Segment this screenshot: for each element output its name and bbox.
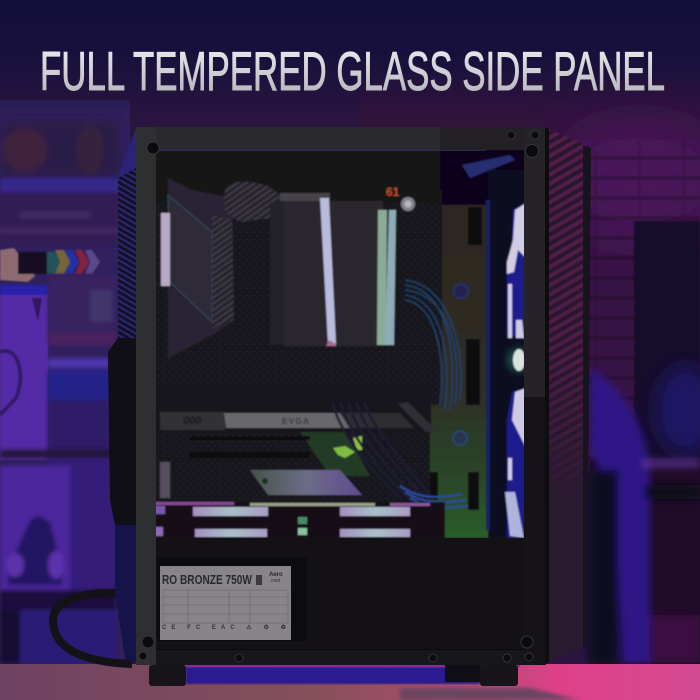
desk surface <box>0 664 700 700</box>
bottom fans <box>150 502 445 538</box>
case: top inner cable area <box>440 150 526 205</box>
desk glow under case <box>186 665 520 684</box>
white light strip left <box>161 213 170 286</box>
M.2 heatsink plate <box>250 470 362 495</box>
sleeved cable bundle <box>405 280 461 410</box>
top dark fade <box>0 0 700 120</box>
case: glass frame <box>136 127 546 665</box>
background: wall right of poster <box>48 275 116 458</box>
blue sleeved cables low <box>400 486 468 508</box>
background: dark monitor <box>634 221 700 459</box>
VRM heatsink <box>224 182 285 222</box>
PSU label: RO BRONZE 750W <box>162 573 252 587</box>
green glow logo <box>333 446 355 458</box>
power cable <box>53 593 132 664</box>
RAM sticks <box>377 210 396 345</box>
lower motherboard PCIe area <box>158 432 430 504</box>
led display: 61 <box>386 185 400 199</box>
PSU label: cool <box>271 578 280 584</box>
PSU label <box>160 566 291 640</box>
graphics card <box>149 386 436 434</box>
carbon fibre front panel <box>545 127 591 664</box>
motherboard <box>155 152 442 405</box>
background: shelf <box>0 178 120 244</box>
PSU label: Aero <box>269 572 283 578</box>
background: purple poster <box>0 285 48 460</box>
case: left mesh front panel edge <box>118 128 136 340</box>
icon: grommet <box>454 284 468 298</box>
PC case <box>108 127 591 665</box>
case: frame bars <box>136 127 545 665</box>
background: upper left blobs <box>0 120 120 178</box>
side fans behind glass <box>486 170 532 538</box>
background: figurine and chevron books <box>0 248 100 282</box>
graphics card: 000 <box>183 415 202 427</box>
graphics card: EVGA <box>282 416 310 426</box>
PSU window <box>157 558 307 641</box>
PSU shroud <box>136 538 526 665</box>
case: motherboard tray right <box>415 205 506 538</box>
background: gaming chair <box>590 368 700 665</box>
CPU cooler <box>270 193 383 346</box>
case: cutouts in tray <box>468 207 482 245</box>
power cables <box>332 402 432 498</box>
interior behind glass <box>149 150 532 538</box>
rear IO cover <box>168 178 234 358</box>
case feet <box>149 665 518 686</box>
PSU label: CE FC EAC ⚠ ⚙ ♻ <box>162 624 286 631</box>
screws <box>139 131 539 662</box>
background: framed art <box>0 450 116 664</box>
